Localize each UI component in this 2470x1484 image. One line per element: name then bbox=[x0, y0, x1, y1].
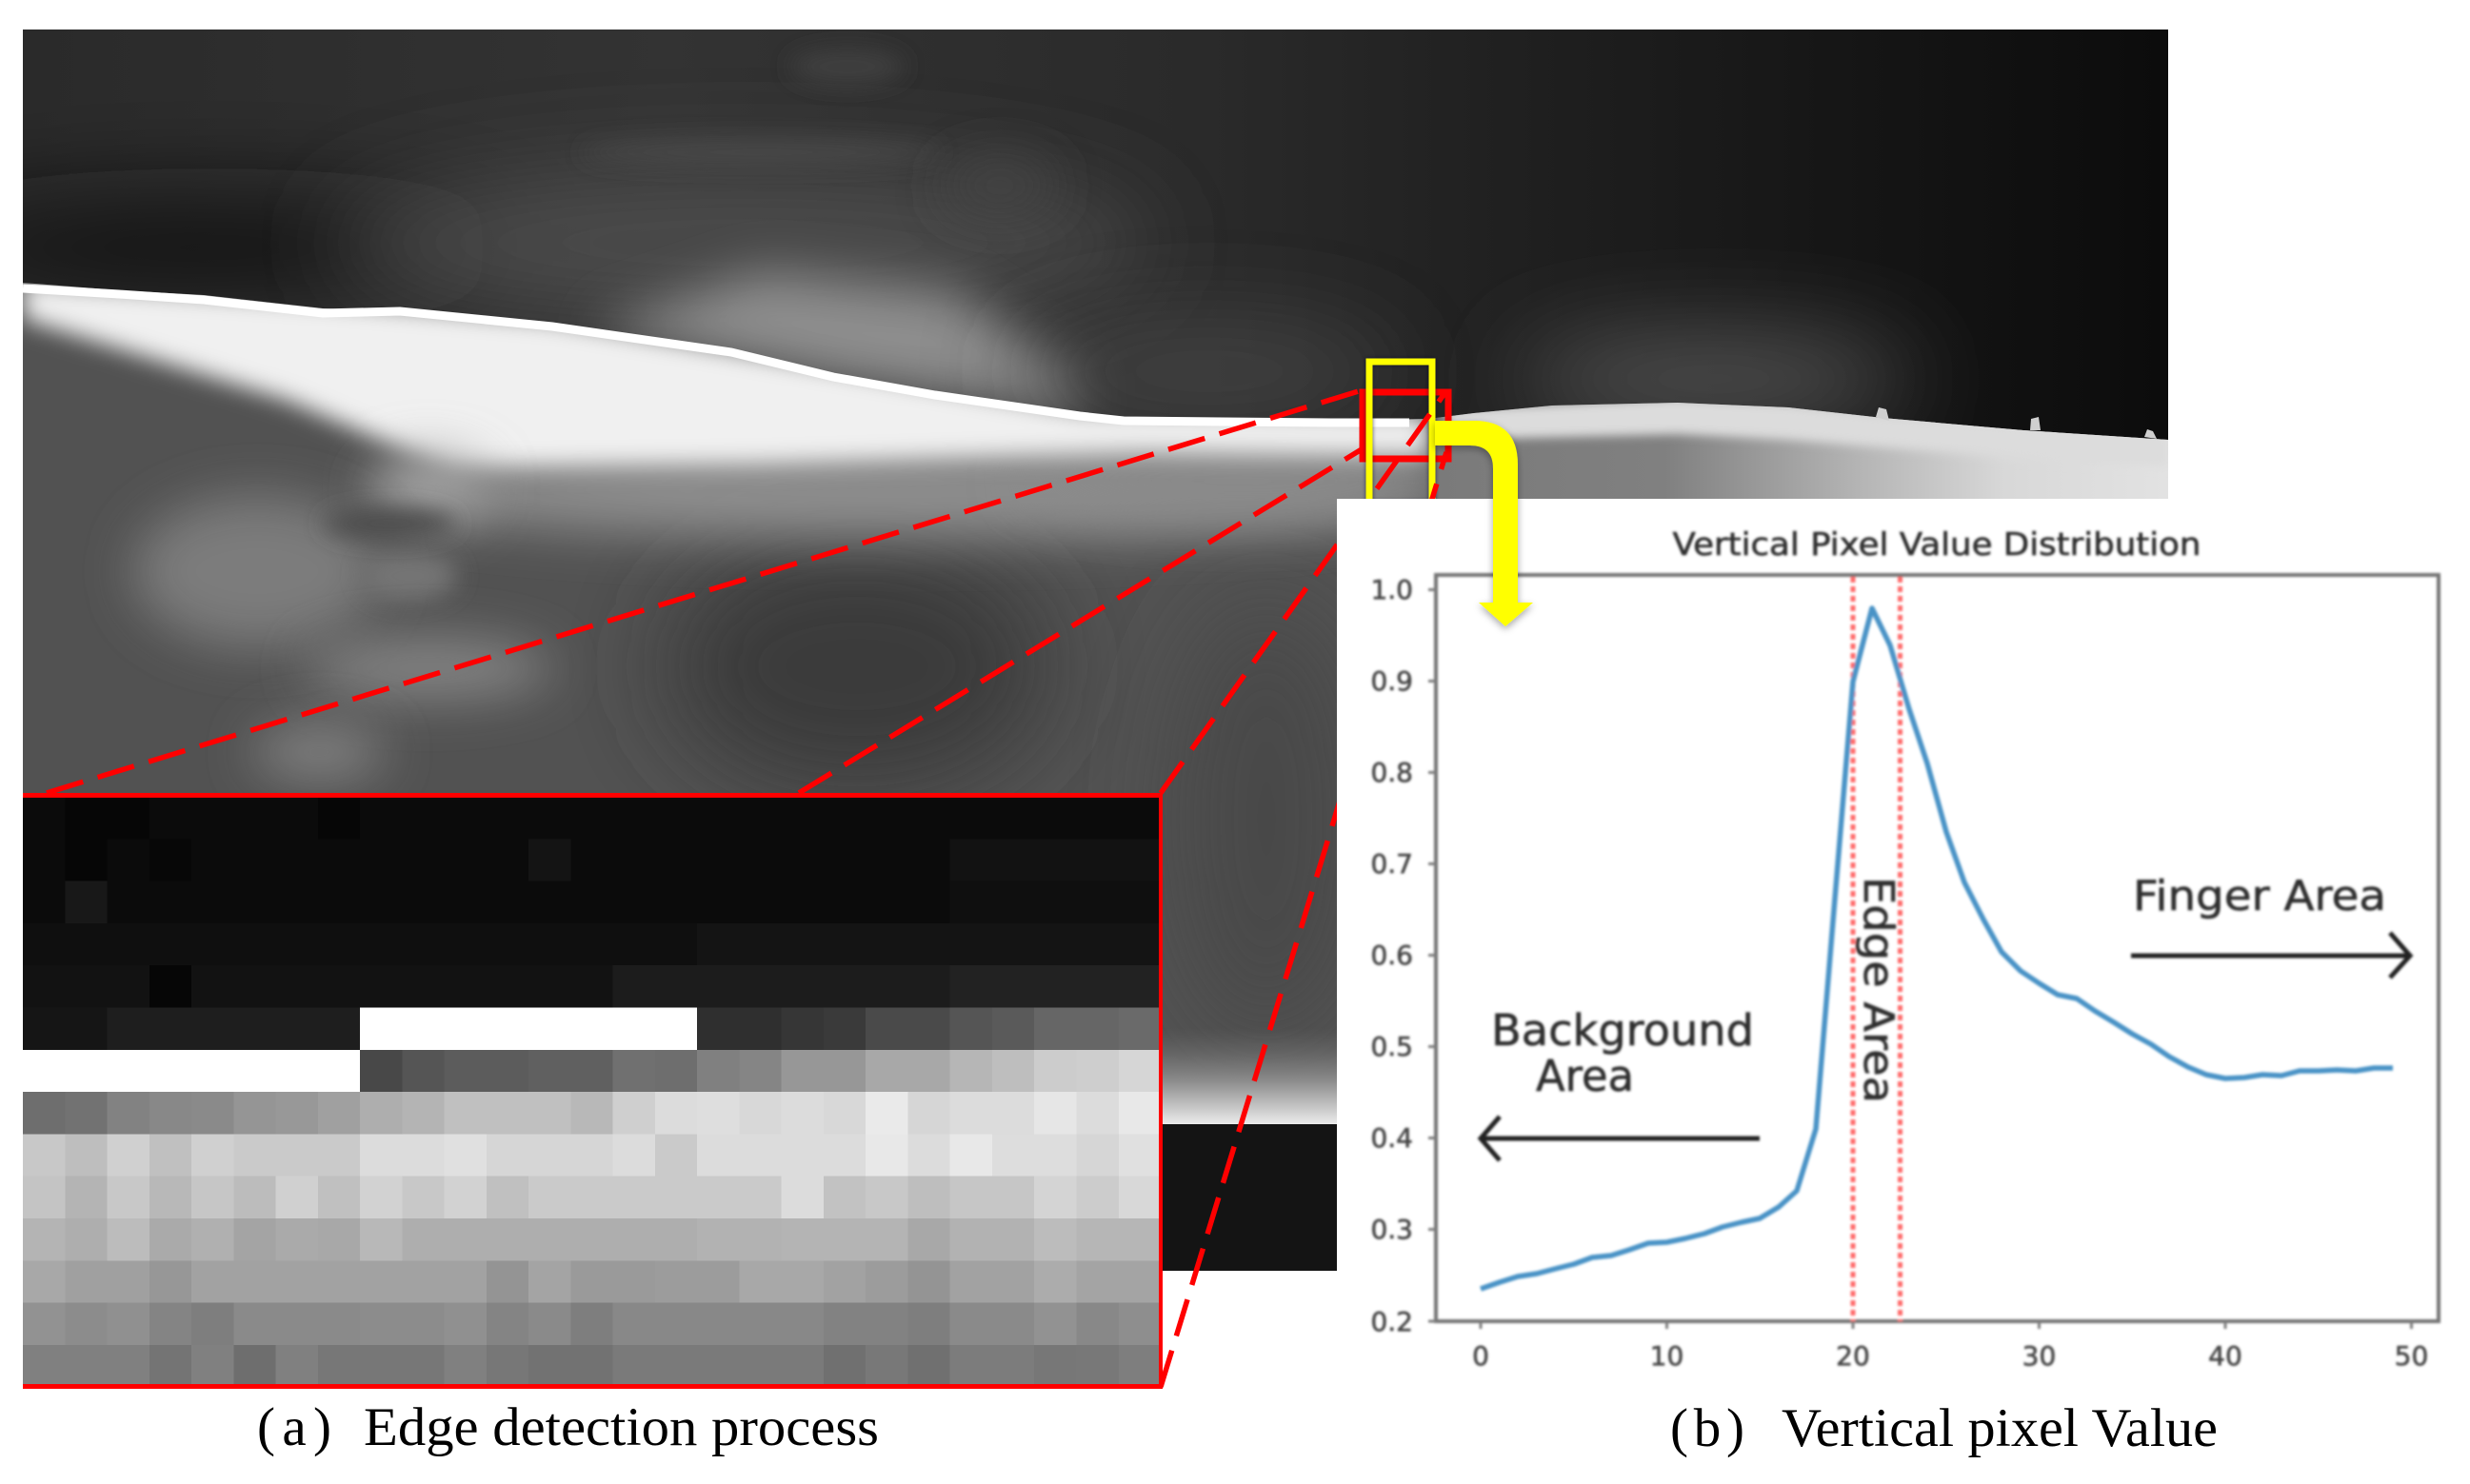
y axis labels: 0.5 bbox=[1370, 1031, 1413, 1062]
arrow: finger area bbox=[2131, 933, 2410, 978]
caption (b): (b) bbox=[1670, 1398, 1744, 1458]
axes frame bbox=[1436, 575, 2439, 1321]
red zoom region box bbox=[1363, 392, 1448, 459]
small skin protrusions bbox=[1876, 407, 2157, 439]
panel: magnified pixel inset bbox=[23, 793, 1163, 1389]
y axis labels: 0.4 bbox=[1370, 1122, 1413, 1154]
panel: finger edge photograph bbox=[0, 30, 2168, 1271]
y axis labels: 0.2 bbox=[1370, 1306, 1413, 1337]
y axis labels: 1.0 bbox=[1370, 574, 1413, 605]
x axis labels: 0 bbox=[1472, 1340, 1489, 1372]
red dashed zoom guide lines bbox=[47, 390, 1446, 1387]
finger body bbox=[23, 267, 2168, 1133]
x axis labels: 20 bbox=[1836, 1340, 1870, 1372]
chart title: Vertical Pixel Value Distribution bbox=[1672, 525, 2201, 563]
tick marks bbox=[1428, 590, 2411, 1329]
red dotted edge bounds bbox=[1853, 577, 1901, 1321]
label: edge area: Edge Area bbox=[1854, 877, 1902, 1103]
x axis labels: 50 bbox=[2395, 1340, 2428, 1372]
dark area below the finger bbox=[1163, 1124, 1337, 1271]
x axis labels: 30 bbox=[2022, 1340, 2056, 1372]
y axis labels: 0.9 bbox=[1370, 665, 1413, 697]
yellow vertical sampling box bbox=[1369, 362, 1432, 505]
y axis labels: 0.8 bbox=[1370, 757, 1413, 788]
label: background area: Area bbox=[1536, 1051, 1634, 1101]
yellow bent arrow bbox=[1435, 421, 1533, 626]
line chart: vertical pixel value distribution bbox=[1370, 525, 2439, 1372]
caption (b): Vertical pixel Value bbox=[1782, 1398, 2218, 1458]
y axis labels: 0.6 bbox=[1370, 940, 1413, 971]
x axis labels bbox=[1472, 1340, 2428, 1372]
caption (a): (a) bbox=[257, 1397, 331, 1457]
label: finger area: Finger Area bbox=[2133, 872, 2386, 920]
label: background area bbox=[1491, 1005, 1754, 1101]
x axis labels: 10 bbox=[1650, 1340, 1683, 1372]
label: background area: Background bbox=[1491, 1005, 1754, 1056]
y axis labels: 0.7 bbox=[1370, 848, 1413, 880]
arrow: background area bbox=[1481, 1117, 1760, 1160]
y axis labels: 0.3 bbox=[1370, 1214, 1413, 1245]
blue pixel value curve bbox=[1481, 608, 2393, 1289]
caption (a): Edge detection process bbox=[364, 1397, 879, 1457]
y axis labels bbox=[1370, 574, 1413, 1337]
x axis labels: 40 bbox=[2208, 1340, 2242, 1372]
detected white edge line bbox=[23, 288, 1409, 423]
panel: white chart background bbox=[1337, 499, 2470, 1484]
